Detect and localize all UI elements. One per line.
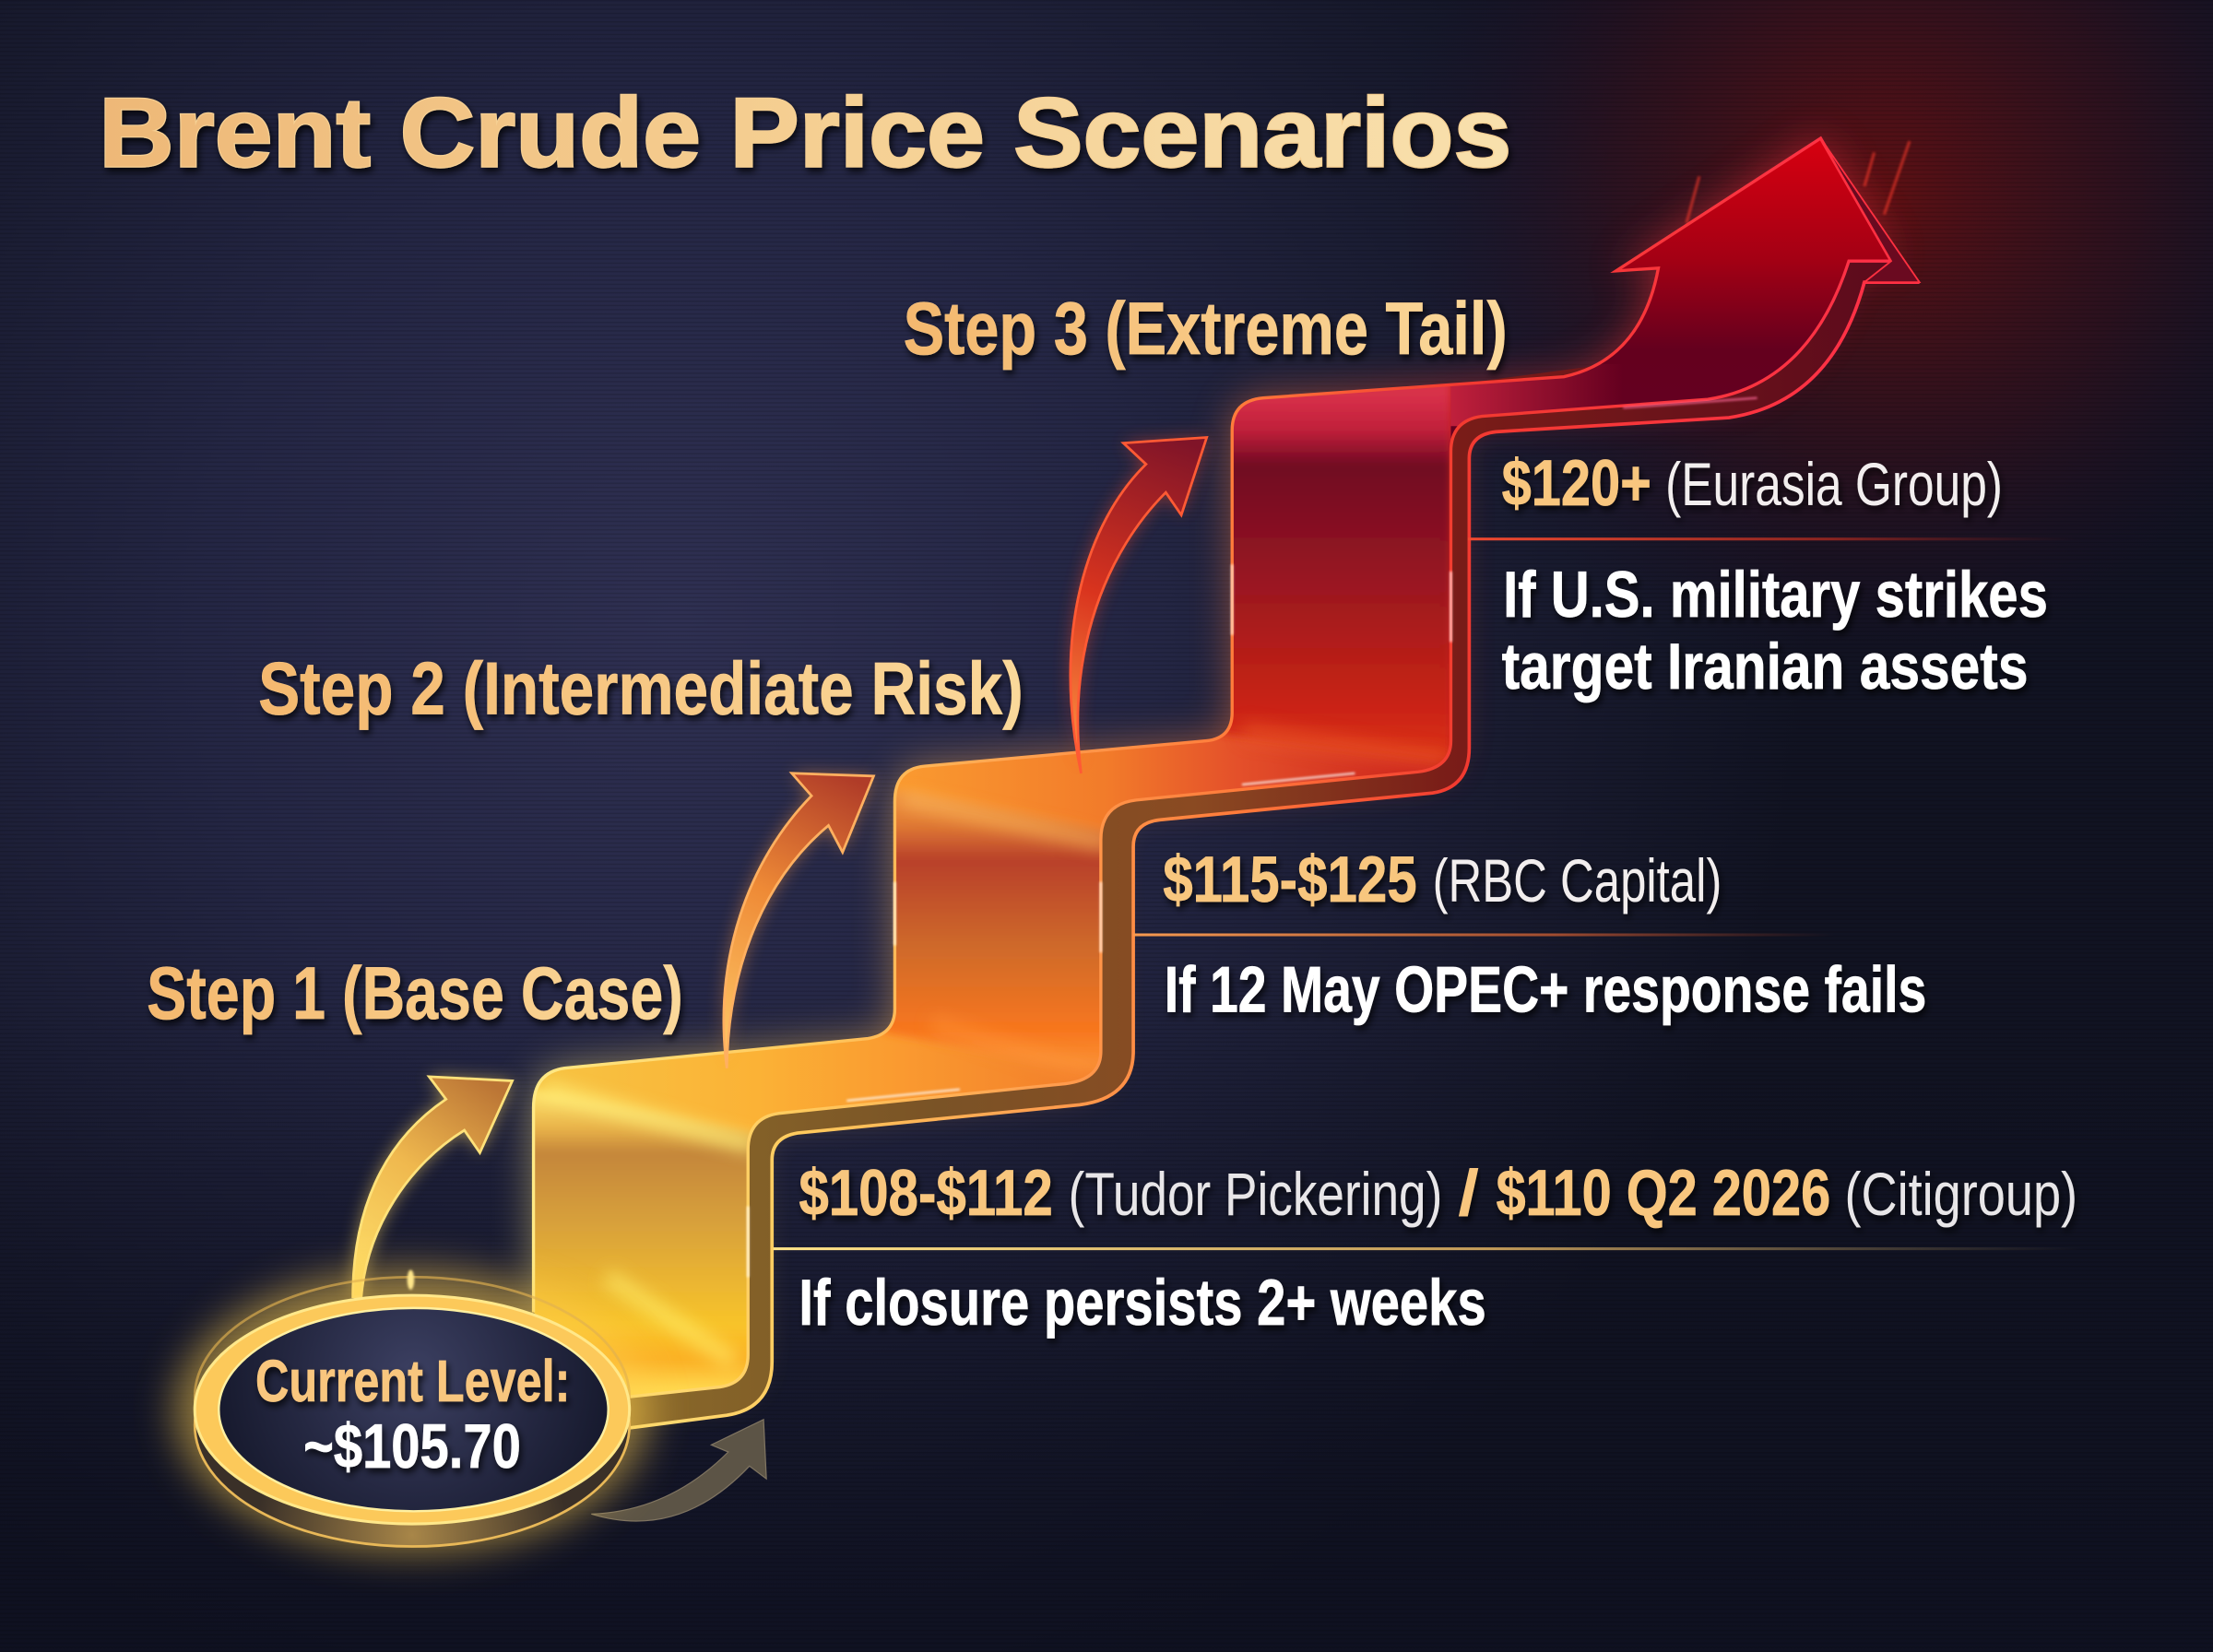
title: Brent Crude Price Scenarios [99,77,1511,188]
sparkle on disc [408,1270,414,1290]
current level disc [175,1270,649,1552]
scenario 1 text: (Tudor Pickering) [1069,1160,1442,1228]
step 1 heading: Step 1 (Base Case) [147,952,683,1035]
riser 1 [533,1087,749,1396]
highlight stripes [543,1090,755,1146]
ribbon surface [522,127,1934,1411]
scenario 2 text: (RBC Capital) [1433,846,1722,914]
arrow: step 3 [1071,437,1207,773]
scenario 2 text [1133,843,1926,1025]
current level label: Current Level: [255,1348,570,1414]
scenario 3 text [1468,446,2075,702]
scenario 1 text: $110 Q2 2026 [1496,1156,1830,1229]
step 2 heading: Step 2 (Intermediate Risk) [258,647,1024,730]
staircase ribbon arrow [522,127,1934,1428]
scenario 3 text: target Iranian assets [1502,630,2028,702]
step 3 heading: Step 3 (Extreme Tail) [904,288,1508,371]
scenario 1 text: / [1458,1156,1479,1229]
arrow: step 1 [353,1077,513,1297]
shaft and arrowhead [1451,140,1888,439]
arrowhead glints [1686,141,1910,223]
scenario 2 text: If 12 May OPEC+ response fails [1165,952,1926,1025]
scenario 1 text: $108-$112 [799,1156,1053,1229]
riser 2 [883,787,1115,1075]
arrowhead 3D side [1820,138,1920,282]
current level value: ~$105.70 [303,1412,521,1481]
scenario 3 text: $120+ [1502,446,1651,519]
arrow: faded base [591,1420,766,1521]
scenario 1 text [774,1156,2082,1339]
arrow: step 2 [724,773,873,1068]
scenario 2 text: $115-$125 [1163,843,1417,915]
scenario 3 text: (Eurasia Group) [1665,450,2003,518]
riser 3 [1221,370,1450,762]
sparkles [748,398,1757,1277]
scenario 1 text: (Citigroup) [1845,1160,2077,1228]
scenario 1 text: If closure persists 2+ weeks [799,1266,1486,1339]
scenario 3 text: If U.S. military strikes [1503,558,2048,631]
